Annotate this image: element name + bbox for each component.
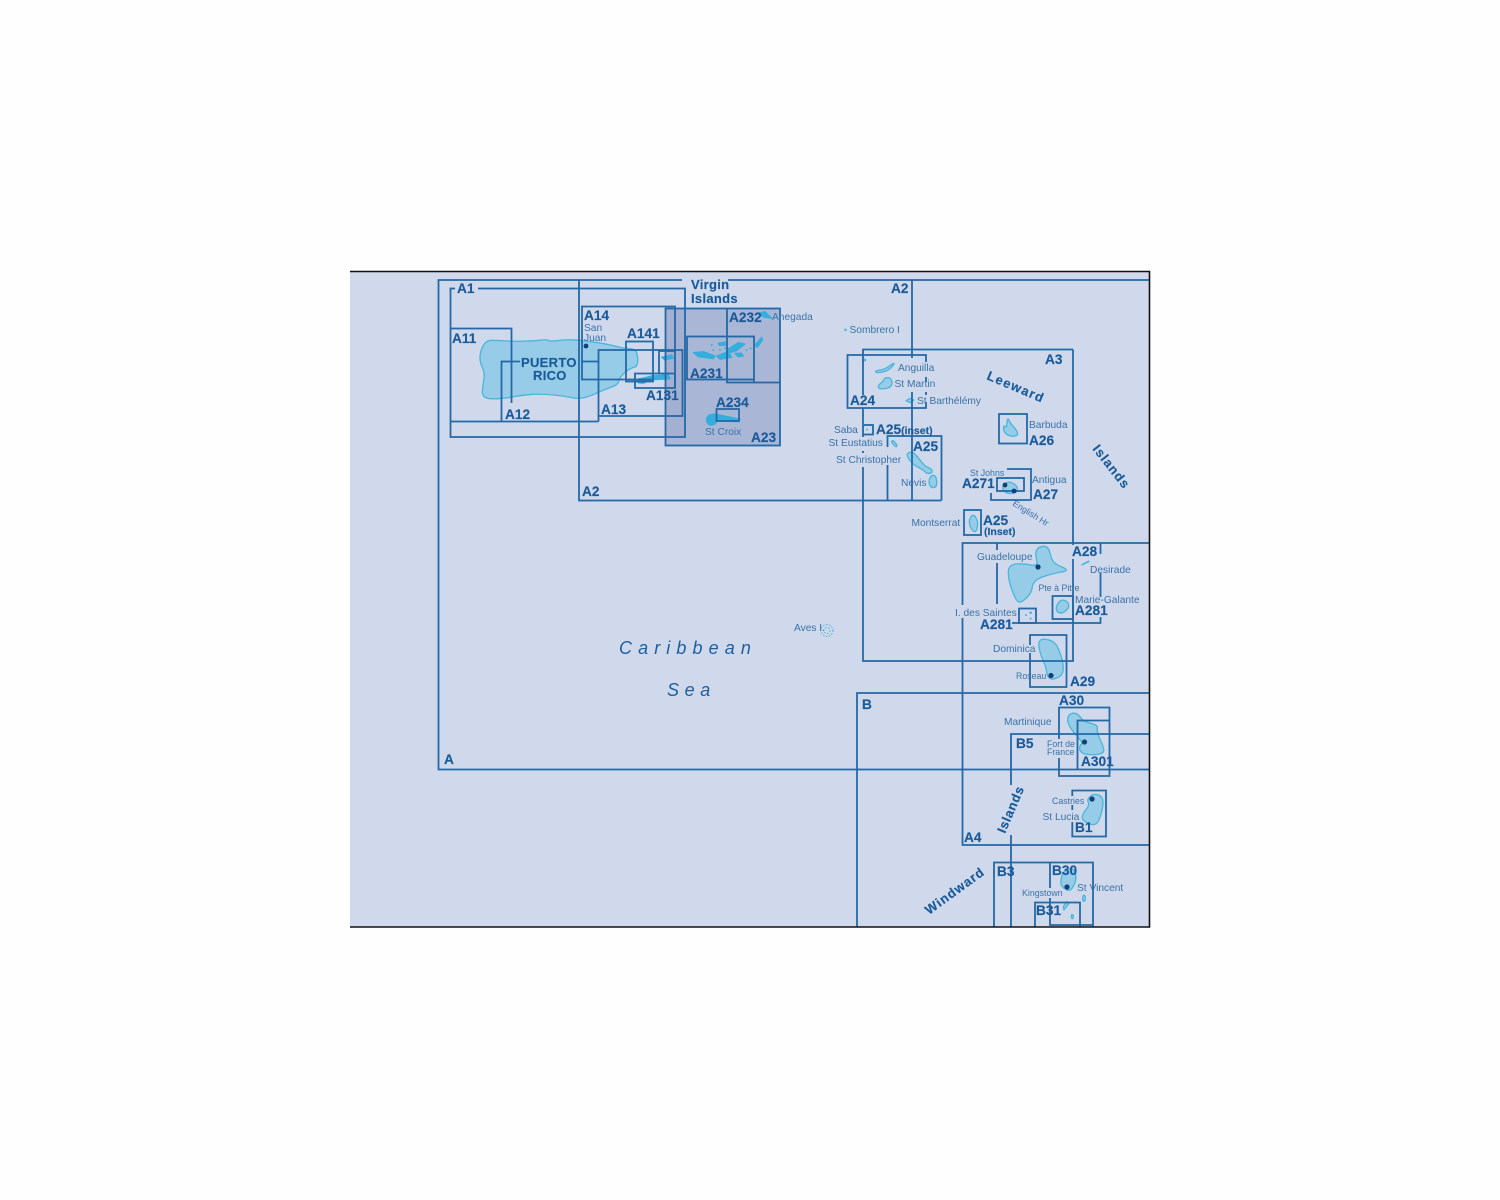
place names: I. des Saintes xyxy=(955,608,1017,619)
place names: San xyxy=(584,323,602,334)
chart labels: A131 xyxy=(646,388,679,403)
B xyxy=(857,693,1150,927)
chart labels xyxy=(444,281,1114,918)
chart labels: B xyxy=(862,697,872,712)
place names: Anguilla xyxy=(898,363,935,374)
sea name xyxy=(619,638,757,700)
place names: Martinique xyxy=(1004,717,1052,728)
place names: St Croix xyxy=(705,427,741,438)
chart labels: B31 xyxy=(1036,903,1061,918)
A301 xyxy=(1078,720,1110,769)
small place names: Pte à Pitre xyxy=(1038,583,1080,593)
place names: Desirade xyxy=(1090,565,1131,576)
A11 xyxy=(450,328,512,403)
chart labels: A234 xyxy=(716,395,749,410)
islands: Puerto Rico xyxy=(480,340,638,399)
chart labels: A2 xyxy=(582,484,600,499)
chart labels: A26 xyxy=(1029,433,1054,448)
chart labels: A11 xyxy=(452,331,477,346)
chart labels: A3 xyxy=(1045,352,1063,367)
chart labels: A232 xyxy=(729,310,762,325)
A27 xyxy=(991,469,1031,500)
region names: Virgin xyxy=(691,277,729,292)
place names: Sombrero I xyxy=(850,325,900,336)
A271 xyxy=(997,478,1024,491)
chart labels: A25 xyxy=(913,439,938,454)
A3 xyxy=(863,350,1073,661)
chart labels: A30 xyxy=(1059,693,1084,708)
small place names: Fort de xyxy=(1047,739,1075,749)
place names: St Vincent xyxy=(1077,883,1123,894)
chart boundaries xyxy=(438,280,1150,927)
chart labels: A25(inset) xyxy=(876,422,933,437)
A231 xyxy=(687,336,754,380)
A28 xyxy=(997,543,1100,623)
place names: Juan xyxy=(584,333,606,344)
place names: St Christopher xyxy=(836,455,902,466)
place names: Saba xyxy=(834,425,858,436)
B30 xyxy=(1050,862,1093,925)
place names: Nevis xyxy=(901,478,926,489)
place names: Dominica xyxy=(993,644,1036,655)
chart labels: A2 xyxy=(891,281,909,296)
region names: Windward xyxy=(922,864,987,917)
A25 xyxy=(888,436,942,500)
chart labels: A29 xyxy=(1070,674,1095,689)
panel: Virgin Islands shaded area xyxy=(666,308,780,446)
chart labels: A24 xyxy=(850,393,875,408)
place names: St Barthélémy xyxy=(917,396,982,407)
A141 xyxy=(626,342,653,382)
place names: Anegada xyxy=(772,312,813,323)
A14 xyxy=(582,306,675,388)
sea name: Sea xyxy=(667,680,716,700)
chart labels: A25 xyxy=(983,513,1008,528)
B3 xyxy=(994,862,1093,927)
A xyxy=(438,280,1150,770)
A23 xyxy=(666,308,780,446)
A26 xyxy=(999,414,1027,444)
islands: Windward group xyxy=(1061,713,1104,919)
chart labels: A23 xyxy=(751,430,776,445)
small place names: France xyxy=(1047,747,1074,757)
Saba box xyxy=(863,425,873,434)
region names: Islands xyxy=(691,291,738,306)
chart labels: B3 xyxy=(997,864,1015,879)
A131 xyxy=(635,351,675,388)
map background xyxy=(350,271,1150,927)
A234 xyxy=(716,409,739,421)
small place names: Roseau xyxy=(1016,671,1046,681)
place names: Guadeloupe xyxy=(977,552,1033,563)
chart labels: B5 xyxy=(1016,736,1034,751)
A13 xyxy=(598,350,682,422)
Marie-Galante box xyxy=(1052,596,1073,619)
A2 xyxy=(579,280,942,500)
chart labels: A12 xyxy=(505,407,530,422)
place names: Aves I. xyxy=(794,623,825,634)
region names: PUERTO xyxy=(521,355,577,370)
place names: Montserrat xyxy=(912,518,960,529)
B1 xyxy=(1072,790,1106,836)
islands: Guadeloupe and Dominica xyxy=(1008,546,1089,679)
chart labels: A xyxy=(444,752,454,767)
region names: Islands xyxy=(994,784,1027,835)
chart labels: A301 xyxy=(1081,754,1114,769)
chart labels: (Inset) xyxy=(984,526,1016,538)
small place names: St Johns xyxy=(970,468,1005,478)
region names: RICO xyxy=(533,368,567,383)
chart labels: A1 xyxy=(457,281,475,296)
small place names: English Hr xyxy=(1011,498,1051,528)
place names: Barbuda xyxy=(1029,420,1068,431)
A232 xyxy=(727,309,780,382)
A29 xyxy=(1030,635,1066,687)
location dots xyxy=(584,344,1095,890)
island: Aves xyxy=(821,624,833,636)
place names: Marie-Galante xyxy=(1075,595,1140,606)
chart labels: B30 xyxy=(1052,863,1077,878)
chart labels: A231 xyxy=(690,366,723,381)
place names xyxy=(584,312,1140,894)
chart labels: A4 xyxy=(964,830,982,845)
small place names: Castries xyxy=(1052,796,1085,806)
Montserrat box xyxy=(964,510,981,535)
chart labels: B1 xyxy=(1075,820,1093,835)
Saintes box xyxy=(1019,608,1036,623)
A12 xyxy=(450,362,598,422)
chart labels: A281 xyxy=(1075,603,1108,618)
region names: Leeward xyxy=(985,368,1047,406)
place names: St Eustatius xyxy=(828,438,883,449)
A4 xyxy=(962,543,1150,845)
chart labels: A28 xyxy=(1072,544,1097,559)
A30 xyxy=(1059,708,1110,776)
region names: Islands xyxy=(1090,442,1133,492)
B5 xyxy=(1011,734,1150,927)
chart labels: A281 xyxy=(980,617,1013,632)
place names: Antigua xyxy=(1032,475,1067,486)
chart labels: A141 xyxy=(627,326,660,341)
chart labels: A14 xyxy=(584,308,609,323)
islands: Leeward group xyxy=(844,329,1018,532)
chart labels: A13 xyxy=(601,402,626,417)
sea name: Caribbean xyxy=(619,638,757,658)
A24 xyxy=(848,355,926,408)
small place names xyxy=(970,468,1085,898)
B31 xyxy=(1035,902,1080,927)
small place names: Kingstown xyxy=(1022,888,1063,898)
islands: Vieques, Culebra, Virgin Islands, St Croix xyxy=(638,312,772,425)
place names: St Lucia xyxy=(1042,812,1080,823)
map frame xyxy=(350,272,1150,927)
A1 xyxy=(450,288,685,437)
chart labels: A271 xyxy=(962,476,995,491)
chart labels: A27 xyxy=(1033,487,1058,502)
place names: St Martin xyxy=(894,379,935,390)
region names xyxy=(521,277,1133,917)
